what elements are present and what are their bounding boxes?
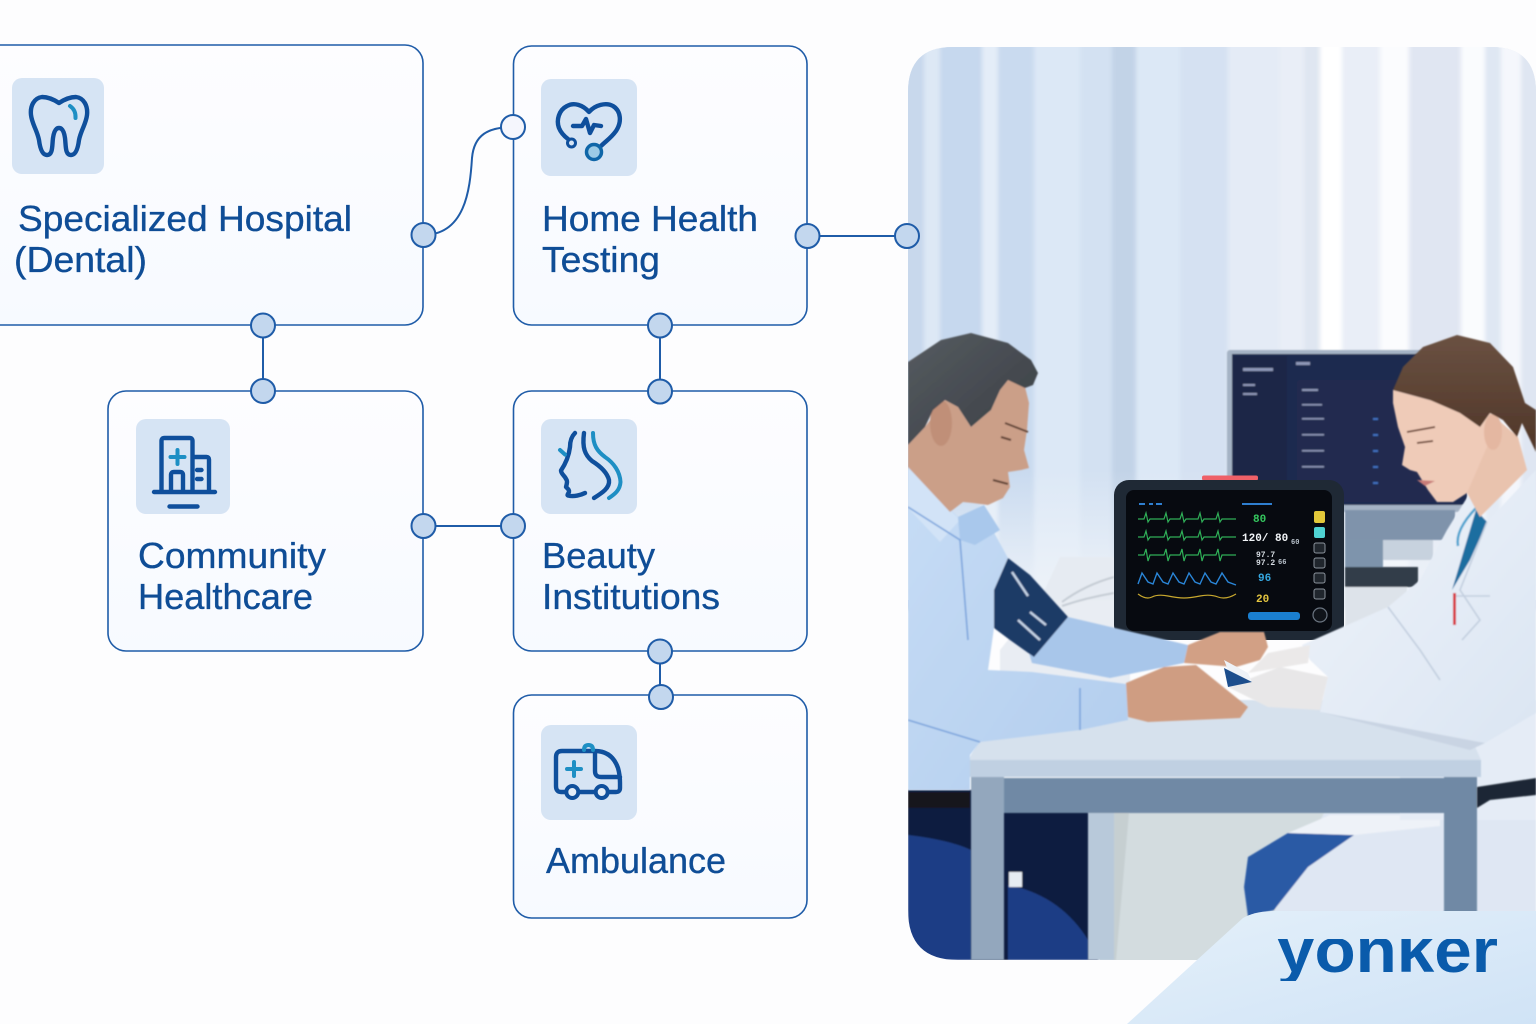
brand panel (1127, 911, 1536, 1024)
side buttons (1313, 511, 1327, 622)
vital readouts: 120/ 80 (1242, 533, 1288, 545)
vital readouts: 20 (1256, 594, 1269, 606)
gloved hands (1248, 645, 1310, 673)
heading: Beauty (542, 535, 655, 576)
ear (1484, 414, 1502, 450)
vital readouts: 66 (1278, 559, 1286, 567)
vital readouts (1242, 514, 1299, 606)
blue action bar (1248, 612, 1300, 620)
vital readouts: 80 (1253, 514, 1266, 526)
card (514, 695, 807, 918)
icon: tooth (12, 78, 104, 174)
floor under table (1100, 812, 1399, 960)
blood pressure cuff (994, 558, 1068, 657)
hair (908, 333, 1038, 445)
card (108, 391, 423, 651)
panel: community healthcare (108, 391, 423, 651)
respiration trace (1138, 594, 1236, 598)
panel: specialized hospital (0, 45, 423, 325)
coat fold lines (1388, 522, 1490, 680)
heading: Home Health (542, 198, 758, 239)
curtain backdrop (904, 40, 1536, 610)
back counter (1000, 576, 1130, 684)
upper sleeve (1025, 617, 1188, 678)
vital readouts: 97.7 (1256, 551, 1275, 560)
heading: Testing (542, 239, 660, 280)
vital signs monitor (1114, 476, 1344, 640)
icon: heart stethoscope (541, 79, 637, 176)
connector: beauty to ambulance (659, 651, 661, 696)
shirt placket and folds (908, 507, 1080, 742)
coat strap (1477, 778, 1536, 808)
card (0, 45, 423, 325)
photo: clinician measuring a patient with a monitor (904, 40, 1536, 960)
background computer monitor (1227, 350, 1467, 632)
hair (1393, 335, 1536, 452)
card (514, 391, 807, 651)
shirt collar (908, 467, 960, 542)
patient: man with blood pressure cuff (908, 333, 1268, 790)
panel background (1127, 911, 1536, 1024)
connector: dental to community (262, 325, 264, 391)
red pen (1453, 593, 1456, 625)
neck and face (908, 380, 1029, 512)
clinician lower coat and knee (1244, 700, 1536, 917)
vital readouts: 96 (1258, 573, 1271, 585)
vital readouts: 60 (1291, 539, 1299, 547)
top fist (1184, 632, 1268, 667)
facial features (1407, 427, 1435, 443)
ECG traces (1138, 513, 1236, 561)
white coat upper body and sleeve (1302, 470, 1536, 743)
pleth trace (1138, 573, 1236, 585)
heading: Community (138, 535, 326, 576)
face (1393, 390, 1490, 502)
connector nodes (251, 115, 919, 709)
heading: Specialized Hospital (18, 198, 352, 239)
red alarm light (1202, 476, 1258, 480)
connector: home health to beauty (659, 325, 661, 391)
heading: (Dental) (14, 239, 147, 280)
connector: home health to photo (807, 235, 907, 237)
small status labels (1139, 503, 1272, 505)
monitor frame (1114, 480, 1344, 640)
shirt torso and lower sleeve (908, 510, 1128, 791)
icon: ambulance (541, 725, 637, 820)
heading: Healthcare (138, 576, 313, 617)
card (514, 46, 807, 325)
panel: beauty institutions (514, 391, 807, 651)
scrubs and stethoscope (1452, 510, 1487, 590)
connector: community to beauty (423, 525, 513, 527)
logo wordmark: yonker (1277, 916, 1498, 986)
icon: face profile (541, 419, 637, 514)
icon: hospital building (136, 419, 230, 514)
clinician: woman in white coat (1228, 335, 1536, 808)
panel: ambulance (514, 695, 807, 918)
lips (1417, 480, 1435, 486)
heading: Institutions (542, 576, 720, 617)
heading: Ambulance (546, 840, 726, 881)
connector: dental to home health (423, 127, 513, 235)
lower hand (1126, 665, 1248, 722)
patient trousers (908, 790, 1098, 960)
monitor screen (1126, 490, 1332, 631)
panel: home health testing (514, 46, 807, 325)
neck (1467, 413, 1527, 517)
ear (930, 400, 952, 446)
vital readouts: 97.2 (1256, 559, 1275, 568)
facial features (993, 423, 1028, 484)
table (968, 700, 1481, 960)
pulse oximeter clip (1224, 660, 1252, 687)
